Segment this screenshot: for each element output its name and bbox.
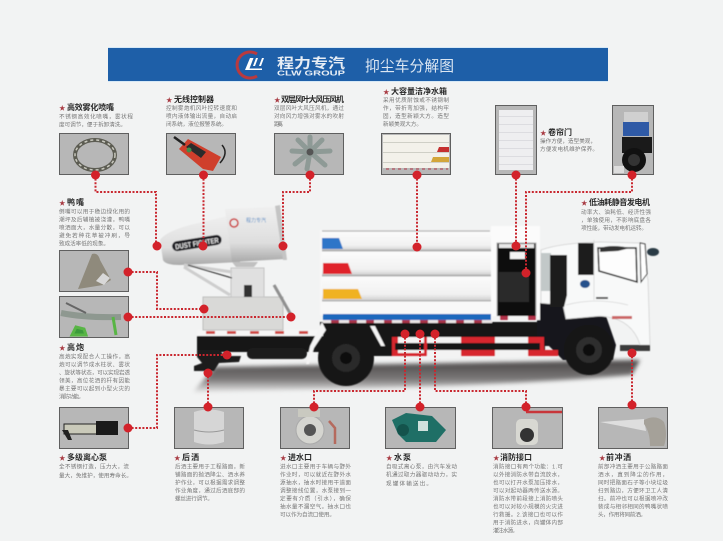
connector dots on truck	[152, 242, 636, 378]
front wheel	[564, 325, 614, 375]
panel: high efficiency nozzle: 不锈钢高效化喷嘴，雾状程	[59, 112, 133, 120]
panel: double layer fan	[274, 94, 344, 180]
panel: wireless controller: 无线控制器	[174, 94, 214, 104]
panel: water pump: 水泵	[394, 452, 411, 462]
panel: water tank: ★	[383, 89, 390, 96]
panel: rear spray: 后洒主要用于工程路面，新	[175, 462, 245, 470]
panel: high gun: ★	[59, 345, 66, 352]
panel: rear spray: 护作业，可以根据需求调整	[175, 478, 245, 486]
panel: wireless controller: 闭系统，液位报警系统。	[166, 120, 227, 128]
panel: water tank: 作，带折弯加强，结构牢	[383, 104, 449, 112]
panel: high gun: 高炮	[67, 342, 84, 352]
panel: double layer fan: 双层风叶大风压风机	[281, 94, 344, 104]
panel: double layer fan: 双层风叶大风压风机，通过	[274, 104, 344, 112]
panel: fire port	[492, 402, 563, 534]
panel: fire port: 也可以对较小规模的火灾进	[493, 502, 563, 510]
cab	[541, 240, 659, 351]
panel: wireless controller: 控制雾炮机风叶控转速度和	[166, 104, 237, 112]
panel: high efficiency nozzle: 度可调节，便于拆卸清洗。	[59, 120, 126, 128]
logo: CLW	[237, 52, 346, 78]
panel: high gun: 高炮实现配合人工操作，高	[59, 352, 130, 360]
panel: rear spray: ★	[174, 455, 181, 462]
panel: wireless controller: ★	[166, 97, 173, 104]
panel: water inlet: 调整接线位置，水泵接到一	[280, 486, 351, 494]
rear deck	[197, 330, 323, 336]
label: DUST FIGHTER: DUST FIGHTER	[174, 236, 220, 251]
panel: roller door: 卷帘门	[548, 127, 572, 137]
panel: generator text: 动率大、油耗低、经济性强	[581, 208, 651, 216]
panel: fire port: 消防接口	[500, 452, 532, 462]
panel: high gun: 暴主要可以起到小型火灾的	[59, 384, 130, 392]
panel: front spray: 同时把路面石子等小块垃圾	[598, 478, 668, 486]
panel: water inlet	[280, 402, 351, 518]
panel: rear spray	[174, 402, 245, 502]
panel: water inlet: 定要有介质（引水），确保	[280, 494, 351, 502]
rear wheel	[318, 330, 374, 386]
panel: water inlet: ★	[280, 455, 287, 462]
panel: generator text: 项性能，带动发电机运转。	[581, 224, 647, 232]
panel: duckbill: ★	[59, 200, 66, 207]
panel: duckbill: 致成活率低的现象。	[59, 240, 109, 248]
panel: rear spray: 螺丝进行调节。	[175, 494, 213, 502]
panel: fire port: 也可以打开水泵加压排水，	[493, 478, 563, 486]
panel: fire port: 用于消防进水，向罐体内部	[493, 518, 563, 526]
fog cannon: 程力专汽	[246, 217, 266, 224]
panel: roller door: 操作方便，造型美观，	[540, 137, 596, 145]
logo: CLW: CLW GROUP	[277, 70, 346, 78]
panel: multistage pump: ★	[59, 455, 66, 462]
panel: generator text: 低油耗静音发电机	[589, 197, 650, 207]
panel: rear spray: 后洒	[182, 452, 199, 462]
wheel arch	[537, 303, 616, 360]
tank stripes	[322, 238, 362, 299]
logo: CLW: 程力专汽	[277, 55, 346, 71]
tank body	[320, 230, 492, 315]
panel: water tank: 固，造型新颖大方。造型	[383, 112, 449, 120]
panel: water inlet: 作业时，可以就近在野外水	[280, 470, 351, 478]
panel: high gun: 、旋状等状态，可以实现岩透	[59, 368, 130, 376]
panel: high efficiency nozzle	[59, 102, 133, 180]
panel: high efficiency nozzle: 高效雾化喷嘴	[67, 102, 114, 112]
panel: rear spray: 铺路面的抛洒降尘、洒水养	[175, 470, 245, 478]
panel: duckbill	[59, 197, 132, 292]
panel: double layer fan: 距离。	[274, 120, 286, 128]
panel: multistage pump: 量大，免维护，使用寿命长。	[59, 472, 132, 480]
fog cannon	[160, 205, 291, 315]
panel: fire port: 消防水带前段接上消防喷头	[493, 494, 563, 502]
panel: water tank: 大容量洁净水箱	[391, 86, 447, 96]
panel: water inlet: 进水口	[288, 452, 312, 462]
panel: water inlet: 源抽水，抽水时接用干道面	[280, 478, 351, 486]
panel: roller door	[496, 106, 598, 180]
red and white side guard	[392, 337, 558, 356]
panel: high efficiency nozzle: ★	[59, 105, 66, 112]
panel: multistage pump	[59, 408, 132, 480]
panel: fire port: 以外接消防水带自流放水，	[493, 470, 563, 478]
panel: roller door: ★	[540, 130, 547, 137]
panel: multistage pump: 全不锈钢打造，压力大，流	[59, 462, 129, 470]
panel: water inlet: 抽水量不漏空气。抽水口也	[280, 502, 351, 510]
panel: water pump: 自吸式离心泵，由汽车发动	[386, 462, 457, 470]
panel: front spray: 扫。前冲也可以根据喷冲改	[598, 494, 668, 502]
panel: high gun	[59, 296, 132, 400]
panel: fire port: 可以对起动器两传送水源。	[493, 486, 563, 494]
panel: double layer fan: 对向风力增强对雾水的吹射	[274, 112, 344, 120]
panel: duckbill: 鸭嘴	[67, 197, 84, 207]
truck illustration	[160, 205, 659, 386]
panel: front spray: 扫到路边，方便环卫工人清	[598, 486, 668, 494]
panel: front spray: 头，作用将同前洒。	[598, 510, 646, 518]
panel: water pump	[386, 402, 457, 488]
panel: fire port: ★	[493, 455, 500, 462]
panel: front spray: 前部冲洒主要用于公路路面	[598, 462, 668, 470]
panel: front spray: 前冲洒	[606, 452, 631, 462]
panel: duckbill: 潮坪及后辅植被浇灌，鸭嘴	[59, 216, 130, 224]
rear compartment	[491, 226, 540, 320]
connector lines	[96, 175, 632, 428]
panel: water tank: 采用优质耐蚀或不锈钢制	[383, 96, 449, 104]
chassis	[197, 335, 322, 352]
panel: roller door: 方便发电机维护保养。	[540, 145, 598, 153]
panel: duckbill: 避免若种花草被冲刷，导	[59, 232, 130, 240]
panel: front spray: 装成与相邻相同的鸭嘴状喷	[598, 502, 668, 510]
panel: water tank: 新颖美观大方。	[383, 120, 422, 128]
panel: generator text: ，单独使用，不影响底盘各	[581, 216, 651, 224]
panel: double layer fan: ★	[274, 97, 281, 104]
panel: water pump: 现罐体输送出。	[386, 480, 432, 488]
panel: fire port: 行救援。2.该接口也可以作	[493, 510, 563, 518]
panel: wireless controller: 喷内液体输出流量，自动启	[166, 112, 237, 120]
ground shadow	[193, 360, 640, 392]
panel: fire port: 消防接口有两个功能：1.可	[493, 462, 563, 470]
pump box platform	[203, 297, 283, 330]
panel: rear spray: 作业角度，通过后洒底部的	[175, 486, 245, 494]
panel: generator text	[581, 197, 651, 232]
panel: high gun: 消防功能。	[59, 392, 84, 400]
panel: generator image	[612, 106, 654, 180]
panel: front spray	[598, 400, 668, 518]
panel: water tank	[382, 86, 450, 180]
panel: generator text: ★	[581, 200, 588, 207]
panel: water inlet: 可以作为自流口使用。	[280, 510, 335, 518]
panel: water inlet: 进水口主要用于车辆与野外	[280, 462, 351, 470]
panel: water pump: 机通过取力器驱动动力，实	[386, 470, 457, 478]
panel: duckbill: 喷洒面大，水量分散，可以	[59, 224, 130, 232]
panel: duckbill: 倒嘴可以用于稳边绿化用的	[59, 208, 130, 216]
banner title: 抑尘车分解图	[365, 58, 454, 75]
panel: front spray: 洒水，直到降尘的作用，	[598, 470, 668, 478]
header banner	[108, 47, 608, 82]
panel: high gun: 领美，高位花洒的杆有因能	[59, 376, 130, 384]
panel: multistage pump: 多级离心泵	[67, 452, 107, 462]
panel: fire port: 灌注水源。	[493, 526, 518, 534]
panel: water pump: ★	[386, 455, 393, 462]
panel: front spray: ★	[599, 455, 606, 462]
panel: high gun: 炮可以调节成水柱状、雾状	[59, 360, 130, 368]
panel: wireless controller	[166, 94, 237, 180]
